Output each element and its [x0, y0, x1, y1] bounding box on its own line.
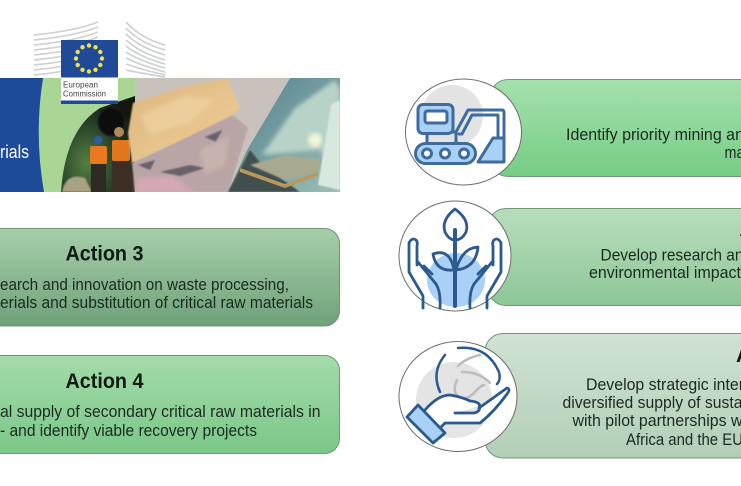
- photo: microchip: [228, 78, 340, 192]
- plant drawing: [409, 209, 501, 308]
- excavator drawing: [416, 104, 504, 164]
- action 4 text line 2: - and identify viable recovery projects: [0, 422, 257, 440]
- panel: action 1: [490, 80, 741, 176]
- panel: action 2: [488, 208, 741, 306]
- action 3 box: [0, 228, 340, 326]
- icon: hand holding globe: [399, 342, 517, 452]
- logo wordmark line 2: Commission: [63, 89, 106, 99]
- logo blue strip: [61, 100, 118, 104]
- panel: action 4: [0, 356, 340, 454]
- logo wordmark line 1: European: [63, 80, 98, 90]
- plant blue backdrop: [427, 253, 485, 307]
- photo: mineral rock: [128, 78, 290, 192]
- excavator circle: [406, 79, 522, 185]
- photo: miners: [61, 96, 135, 192]
- banner cropped title: rials: [0, 142, 29, 162]
- action 5 box: [485, 334, 741, 458]
- globe shade: [416, 362, 492, 438]
- action 2 box: [488, 208, 741, 306]
- action 1 box: [490, 80, 741, 176]
- action 3 heading: Action 3: [66, 242, 144, 266]
- action 4 box: [0, 356, 340, 454]
- European Commission building logo: [34, 22, 165, 77]
- icon: excavator: [406, 79, 522, 185]
- globe circle: [399, 342, 517, 452]
- EU flag logo: [61, 40, 118, 104]
- panel: action 3: [0, 228, 340, 326]
- banner blue title area: [0, 78, 44, 192]
- logo white label: [61, 78, 118, 100]
- icon: hands holding plant: [399, 201, 511, 311]
- cuff: [407, 405, 445, 443]
- action 4 heading: Action 4: [66, 370, 144, 393]
- action 3 text line 2: erials and substitution of critical raw materials: [0, 294, 313, 312]
- flag: [61, 40, 118, 78]
- banner green background: [38, 78, 135, 192]
- excavator shade: [421, 85, 483, 147]
- globe arcs: [436, 348, 500, 392]
- action 4 text line 1: al supply of secondary critical raw materials in: [0, 403, 320, 421]
- banner image: [0, 78, 340, 192]
- plant circle: [399, 201, 511, 311]
- action 3 text line 1: earch and innovation on waste processing,: [0, 276, 289, 294]
- panel: action 5: [485, 334, 741, 458]
- flag stars: [74, 43, 104, 74]
- hand: [425, 388, 509, 431]
- globe continents: [455, 355, 490, 398]
